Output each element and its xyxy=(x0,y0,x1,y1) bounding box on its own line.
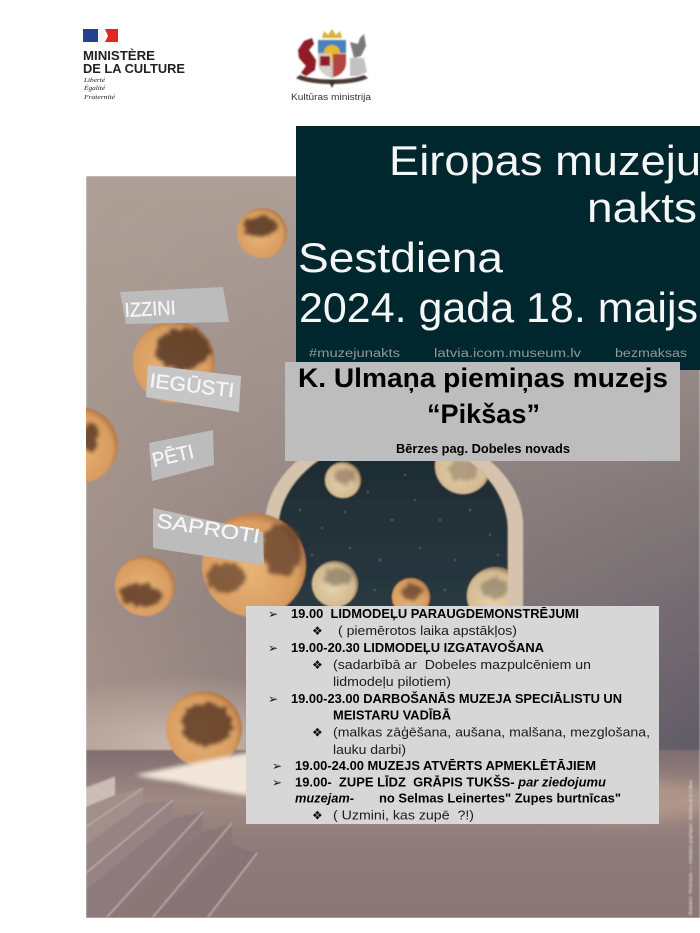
programme item: 19.00 demonstrations: ( piemērotos laika apstākļos) xyxy=(338,624,517,638)
moon xyxy=(237,208,287,258)
window moon xyxy=(325,462,361,498)
header logo: Ministère de la Culture: DE LA CULTURE xyxy=(83,62,185,76)
panel: museum title: Bērzes pag. Dobeles novads xyxy=(396,442,570,456)
programme item: 19.00-24.00 open: ➢ xyxy=(272,759,282,773)
moon xyxy=(115,556,175,616)
moon xyxy=(166,691,242,767)
label: PĒTI xyxy=(149,430,214,481)
programme item: 19.00-24.00 open: 19.00-24.00 MUZEJS ATVĒRTS APMEKLĒTĀJIEM xyxy=(295,759,596,773)
banner heading: nakts: nakts xyxy=(587,184,697,231)
programme item: 19.00 demonstrations xyxy=(268,607,579,638)
moon xyxy=(202,513,306,617)
programme item: 19.00-20.30 making models xyxy=(268,640,591,689)
programme item: soup: no Selmas Leinertes" Zupes burtnīcas" xyxy=(379,792,621,806)
header logo: Ministère de la Culture xyxy=(83,29,185,101)
label: IZZINI xyxy=(120,287,229,324)
banner tags: latvia.icom.museum.lv xyxy=(434,348,581,360)
label: PĒTI: PĒTI xyxy=(150,440,196,472)
panel: museum title: K. Ulmaņa piemiņas muzejs xyxy=(298,363,668,393)
header logo: Ministère de la Culture: Fraternité xyxy=(83,94,115,101)
programme item: soup: ❖ xyxy=(312,808,323,822)
banner tags xyxy=(309,348,687,360)
programme item: soup xyxy=(272,774,621,822)
window moon xyxy=(312,561,358,607)
programme item: 19.00-23.00 workshops: MEISTARU VADĪBĀ xyxy=(333,708,451,722)
window arch xyxy=(265,461,524,606)
panel: programme xyxy=(246,606,659,824)
programme item: 19.00-20.30 making models: ➢ xyxy=(268,641,278,655)
programme item: 19.00-23.00 workshops: lauku darbi) xyxy=(333,743,406,757)
programme item: soup: ➢ xyxy=(272,776,282,790)
background poster: room with moons xyxy=(86,176,700,918)
programme item: 19.00-23.00 workshops: 19.00-23.00 DARBOŠANĀS MUZEJA SPECIĀLISTU UN xyxy=(291,691,622,706)
label: SAPROTI xyxy=(153,508,264,565)
programme item: soup: ( Uzmini, kas zupē ?!) xyxy=(333,808,474,822)
floor reflection xyxy=(659,778,700,820)
window moon xyxy=(434,461,488,496)
programme item: 19.00-23.00 workshops: ➢ xyxy=(268,692,278,706)
programme item: 19.00-23.00 workshops: ❖ xyxy=(312,726,323,740)
stairs xyxy=(86,777,257,918)
window moon xyxy=(466,566,509,606)
header logo: Ministère de la Culture: Égalité xyxy=(83,84,105,92)
banner tags: bezmaksas xyxy=(615,348,687,360)
label: IEGŪSTI xyxy=(146,365,241,412)
header logo: Latvian coat of arms, Kultūras ministrija: Kultūras ministrija xyxy=(291,92,372,103)
icon: coat of arms xyxy=(296,29,368,88)
label: SAPROTI: SAPROTI xyxy=(155,510,261,548)
banner heading: Sestdiena: Sestdiena xyxy=(298,234,504,281)
programme item: 19.00 demonstrations: 19.00 LIDMODEĻU PARAUGDEMONSTRĒJUMI xyxy=(291,607,579,621)
programme item: 19.00 demonstrations: ➢ xyxy=(268,607,278,621)
programme item: 19.00-20.30 making models: ❖ xyxy=(312,658,323,672)
header logo: Ministère de la Culture: MINISTÈRE xyxy=(83,48,155,63)
label: IEGŪSTI: IEGŪSTI xyxy=(148,369,236,402)
moon xyxy=(86,406,118,484)
programme item: soup: muzejam- xyxy=(295,792,354,806)
programme item: 19.00 demonstrations: ❖ xyxy=(312,624,323,638)
banner heading: Eiropas muzeju: Eiropas muzeju xyxy=(389,137,700,184)
programme item: 19.00-20.30 making models: 19.00-20.30 LIDMODEĻU IZGATAVOŠANA xyxy=(291,640,544,655)
panel: museum title xyxy=(285,362,680,461)
programme item: 19.00-20.30 making models: lidmodeļu pilotiem) xyxy=(333,675,451,689)
header logo: Latvian coat of arms, Kultūras ministrija xyxy=(291,29,372,103)
header logo: Ministère de la Culture: Liberté xyxy=(83,77,105,84)
programme item: 19.00-23.00 workshops: (malkas zāģēšana, aušana, malšana, mezglošana, xyxy=(333,726,650,740)
floor light patch xyxy=(136,750,246,798)
programme item: 19.00-20.30 making models: (sadarbībā ar Dobeles mazpulcēniem un xyxy=(333,658,591,672)
programme item: 19.00-23.00 workshops xyxy=(268,691,650,757)
moon xyxy=(133,321,215,403)
vertical credit text: Illustration : PhotoSesto — Institutions graphiques : Ministère de la Culture xyxy=(688,779,693,915)
window moon xyxy=(390,576,432,606)
banner heading: date: 2024. gada 18. maijs xyxy=(299,284,698,331)
dark banner xyxy=(296,126,700,370)
banner tags: #muzejunakts xyxy=(309,348,400,360)
panel: museum title: “Pikšas” xyxy=(427,399,540,429)
programme item: soup: 19.00- ZUPE LĪDZ GRĀPIS TUKŠS- par ziedojumu xyxy=(295,774,606,790)
label: IZZINI: IZZINI xyxy=(124,297,176,322)
icon: French flag xyxy=(83,29,118,42)
